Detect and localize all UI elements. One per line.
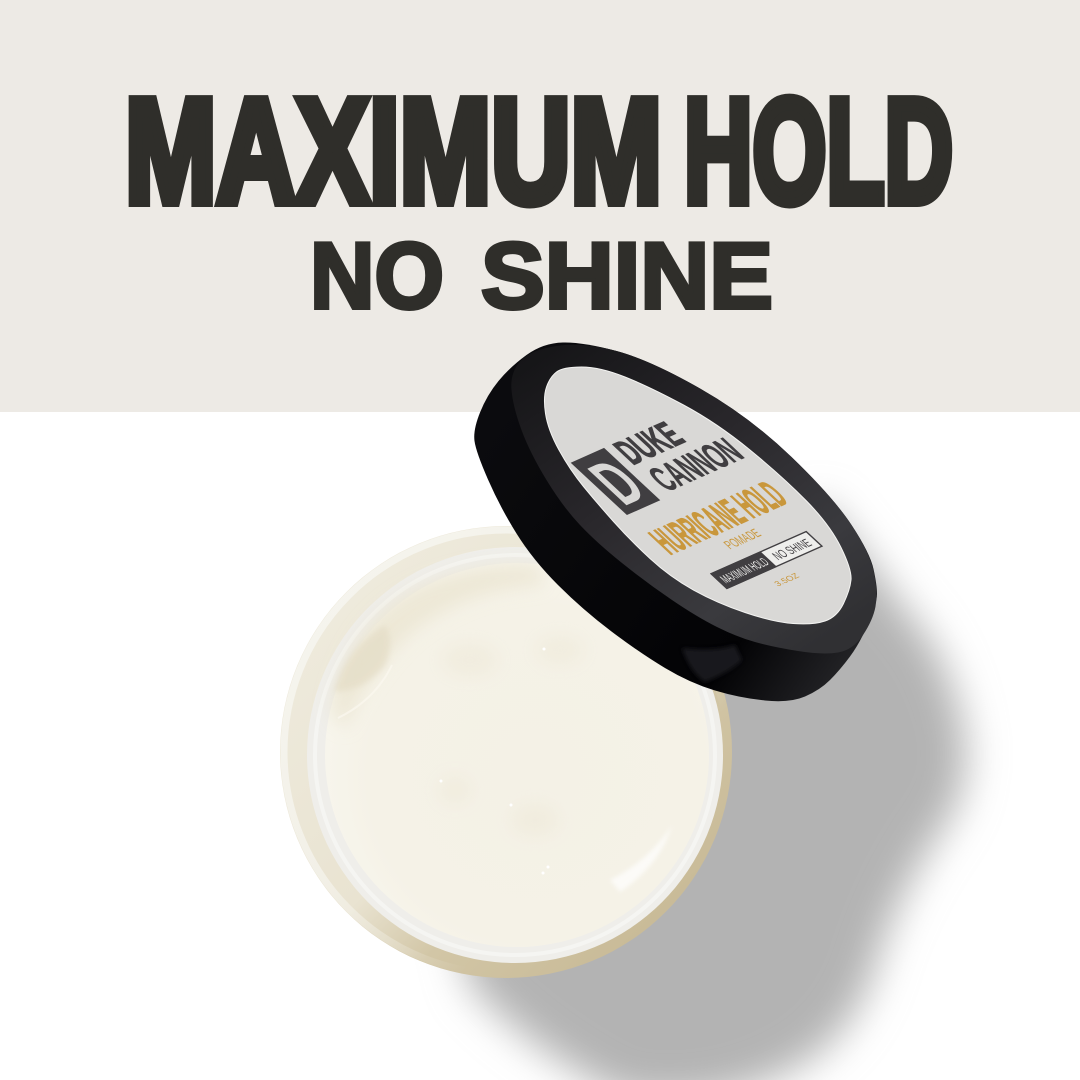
claim badge: NO SHINE	[769, 536, 815, 562]
headline line two: no shine	[310, 223, 773, 328]
headline line two: no shine: SHINE	[481, 223, 773, 328]
cast shadow	[450, 500, 966, 1080]
pomade jar	[280, 526, 732, 978]
headline line one: maximum hold: MAXIMUM	[125, 69, 662, 234]
lid label artwork	[565, 403, 852, 610]
cream gloss lower right	[610, 825, 672, 892]
pomade cream	[325, 563, 709, 947]
lid silhouette and side wall	[474, 342, 877, 701]
brand name	[605, 403, 753, 501]
cream scoop smear	[335, 625, 390, 692]
cream edge shading upper left	[330, 564, 545, 730]
jar inner fine ring	[315, 555, 715, 955]
claim badge: MAXIMUM HOLD	[717, 555, 772, 586]
lid top rim	[511, 345, 876, 653]
headline line two: no shine: NO	[310, 223, 444, 328]
net weight: 3.5OZ	[772, 571, 802, 588]
brand name: CANNON	[639, 431, 753, 499]
cream sparkles	[440, 648, 550, 874]
lid label artwork: HURRICANE HOLD	[639, 473, 797, 562]
jar outer rim	[280, 526, 732, 978]
jar outer pale edge on left	[284, 530, 728, 974]
jar inner band	[307, 547, 723, 963]
logo square: D	[572, 447, 662, 518]
cream scoop highlight	[338, 665, 392, 718]
product type: POMADE	[721, 527, 765, 552]
lid grey label	[544, 367, 851, 624]
top beige band	[0, 0, 1080, 412]
brand name: DUKE	[605, 415, 694, 472]
cream soft texture	[439, 636, 584, 836]
headline	[125, 69, 953, 328]
logo square	[568, 445, 665, 520]
black jar lid	[474, 342, 877, 701]
lid side gloss highlight	[682, 645, 742, 682]
